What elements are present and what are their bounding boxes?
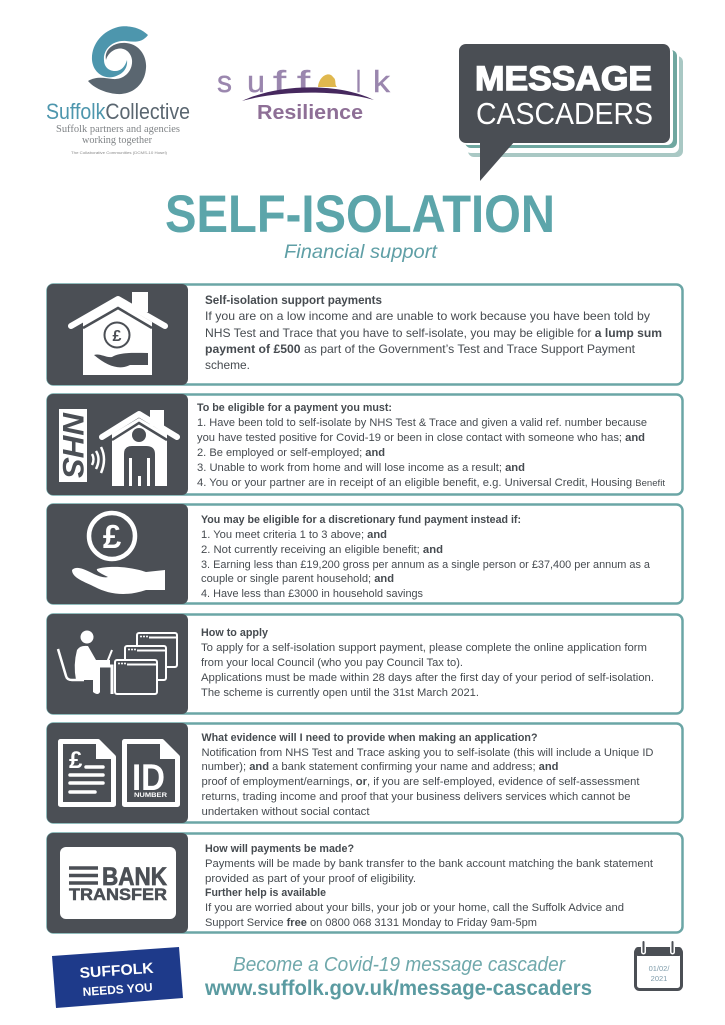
icon: house with coin and hand: £ [113,328,122,345]
text: support payments: If you are on a low income and are unable to work because you have been told by [205,309,650,323]
icon: calendar date [635,942,682,990]
small print: The Collaborative Communities (DCMS-10 Hosel) [71,150,168,155]
icon: house with coin and hand [71,292,165,375]
logo: Suffolk Resilience: Resilience [257,102,363,124]
title: SELF-ISOLATION [165,185,555,244]
text: discretionary fund: You may be eligible for a discretionary fund payment instead if: [201,514,521,526]
text: how to apply [201,627,654,699]
text: support payments: payment of £500 as part of the Government’s Test and Trace Support Payment [205,342,636,356]
footer call to action [204,954,592,1000]
logo: Suffolk Resilience: f [273,64,287,99]
icon: spiral [88,26,148,94]
text: evidence: Notification from NHS Test and Trace asking you to self-isolate (this will include a Unique ID [202,747,654,759]
text: evidence: number); and a bank statement confirming your name and address; and [202,761,559,773]
text: eligibility: you have tested positive for Covid-19 or been in close contact with someone who has; and [197,432,645,444]
text: how to apply: Applications must be made within 28 days after the first day of your period of self-isolation. [201,672,654,684]
icon: bill document [60,741,114,804]
text: discretionary fund [201,514,651,600]
text: eligibility: 2. Be employed or self-employed; and [197,447,385,459]
text: support payments [205,293,662,372]
panel: how payments are made [47,833,682,933]
logo: Suffolk Resilience: u [247,64,265,99]
footer badge: Suffolk needs you: SUFFOLK [79,960,154,982]
wordmark: SuffolkCollective [46,99,190,124]
text: how to apply: To apply for a self-isolation support payment, please complete the online application form [201,642,647,654]
logo: Message Cascaders speech bubble [459,44,683,181]
icon: horizon arc [242,87,374,101]
icon: coin above hand: £ [103,518,122,555]
text: eligibility [197,402,665,489]
text: how payments are made: Payments will be made by bank transfer to the bank account matching the bank statement [205,858,654,870]
text: eligibility: 4. You or your partner are in receipt of an eligible benefit, e.g. Universal Credit, Housing Benefit [197,477,665,489]
text: eligibility: 3. Unable to work from home and will lose income as a result; and [197,462,525,474]
logo: Suffolk Collective [46,26,190,155]
text: discretionary fund: couple or single parent household; and [201,573,394,585]
icon: coin above hand [72,513,165,594]
text: how payments are made: Further help is available [205,887,326,899]
text: how to apply: How to apply [201,627,269,639]
text: eligibility: To be eligible for a payment you must: [197,402,392,414]
subtitle: Financial support [284,242,438,263]
text: discretionary fund: 2. Not currently receiving an eligible benefit; and [201,544,443,556]
panel: discretionary fund [47,504,682,604]
icon: NHS contact and house [56,409,177,486]
logo: Message Cascaders speech bubble: MESSAGE [475,60,652,98]
text: how payments are made: How will payments be made? [205,843,354,855]
panel: support payments [47,284,682,385]
panel: eligibility [47,394,682,495]
text: how payments are made: provided as part of your proof of eligibility. [205,873,416,885]
text: eligibility: 1. Have been told to self-isolate by NHS Test & Trace and given a valid ref. number because [197,417,647,429]
text: discretionary fund: 4. Have less than £3000 in household savings [201,588,423,600]
text: evidence: What evidence will I need to provide when making an application? [202,732,538,744]
text: evidence: returns, trading income and proof that your business delivers services which cannot be [202,791,630,803]
text: how payments are made: Support Service free on 0800 068 3131 Monday to Friday 9am-5pm [205,917,537,929]
text: support payments: Self-isolation support payments [205,293,382,307]
icon: sun [318,74,337,87]
icon: bank transfer: BANK [102,863,167,891]
panel: how to apply [47,614,682,714]
text: evidence [202,732,654,818]
logo: Suffolk Resilience [217,64,391,124]
text: support payments: NHS Test and Trace that you have to self-isolate, you may be eligible for a lump sum [205,326,662,340]
text: support payments: scheme. [205,358,250,372]
icon: ID number document: ID [132,757,165,798]
text: how payments are made [205,843,654,929]
strapline [56,124,180,146]
footer call to action: www.suffolk.gov.uk/message-cascaders [204,977,592,1000]
logo: Suffolk Resilience: l [356,64,361,99]
icon: NHS contact and house: NHS [56,412,89,478]
footer badge: Suffolk needs you: NEEDS YOU [82,980,153,999]
icon: bank transfer: TRANSFER [69,885,167,904]
logo: Suffolk Resilience: k [373,64,391,99]
icon: bank transfer [60,847,176,919]
icon: ID number document [124,741,178,804]
text: evidence: undertaken without social contact [202,806,370,818]
icon: ID number document: NUMBER [134,792,167,799]
footer badge: Suffolk needs you [52,947,183,1008]
icon: bill document: £ [69,747,83,774]
text: how to apply: The scheme is currently open until the 31st March 2021. [201,687,479,699]
icon: calendar date: 01/02/ [649,964,670,973]
panel: evidence [47,723,682,823]
footer call to action: Become a Covid-19 message cascader [233,954,566,976]
text: how payments are made: If you are worried about your bills, your job or your home, call the Suffolk Advice and [205,902,624,914]
logo: Suffolk Resilience: s [217,64,232,99]
strapline: working together [82,135,152,146]
logo: Suffolk Resilience: f [297,64,311,99]
strapline: Suffolk partners and agencies [56,124,180,135]
text: discretionary fund: 3. Earning less than £19,200 gross per annum as a single person or £37,400 per annum as a [201,559,651,571]
text: discretionary fund: 1. You meet criteria 1 to 3 above; and [201,529,387,541]
text: how to apply: from your local Council (who you pay Council Tax to). [201,657,463,669]
icon: calendar date: 2021 [651,974,667,983]
icon: person at laptop with windows [58,630,177,694]
logo: Message Cascaders speech bubble: CASCADERS [476,96,653,131]
text: evidence: proof of employment/earnings, or, if you are self-employed, evidence of self-assessment [202,776,640,788]
